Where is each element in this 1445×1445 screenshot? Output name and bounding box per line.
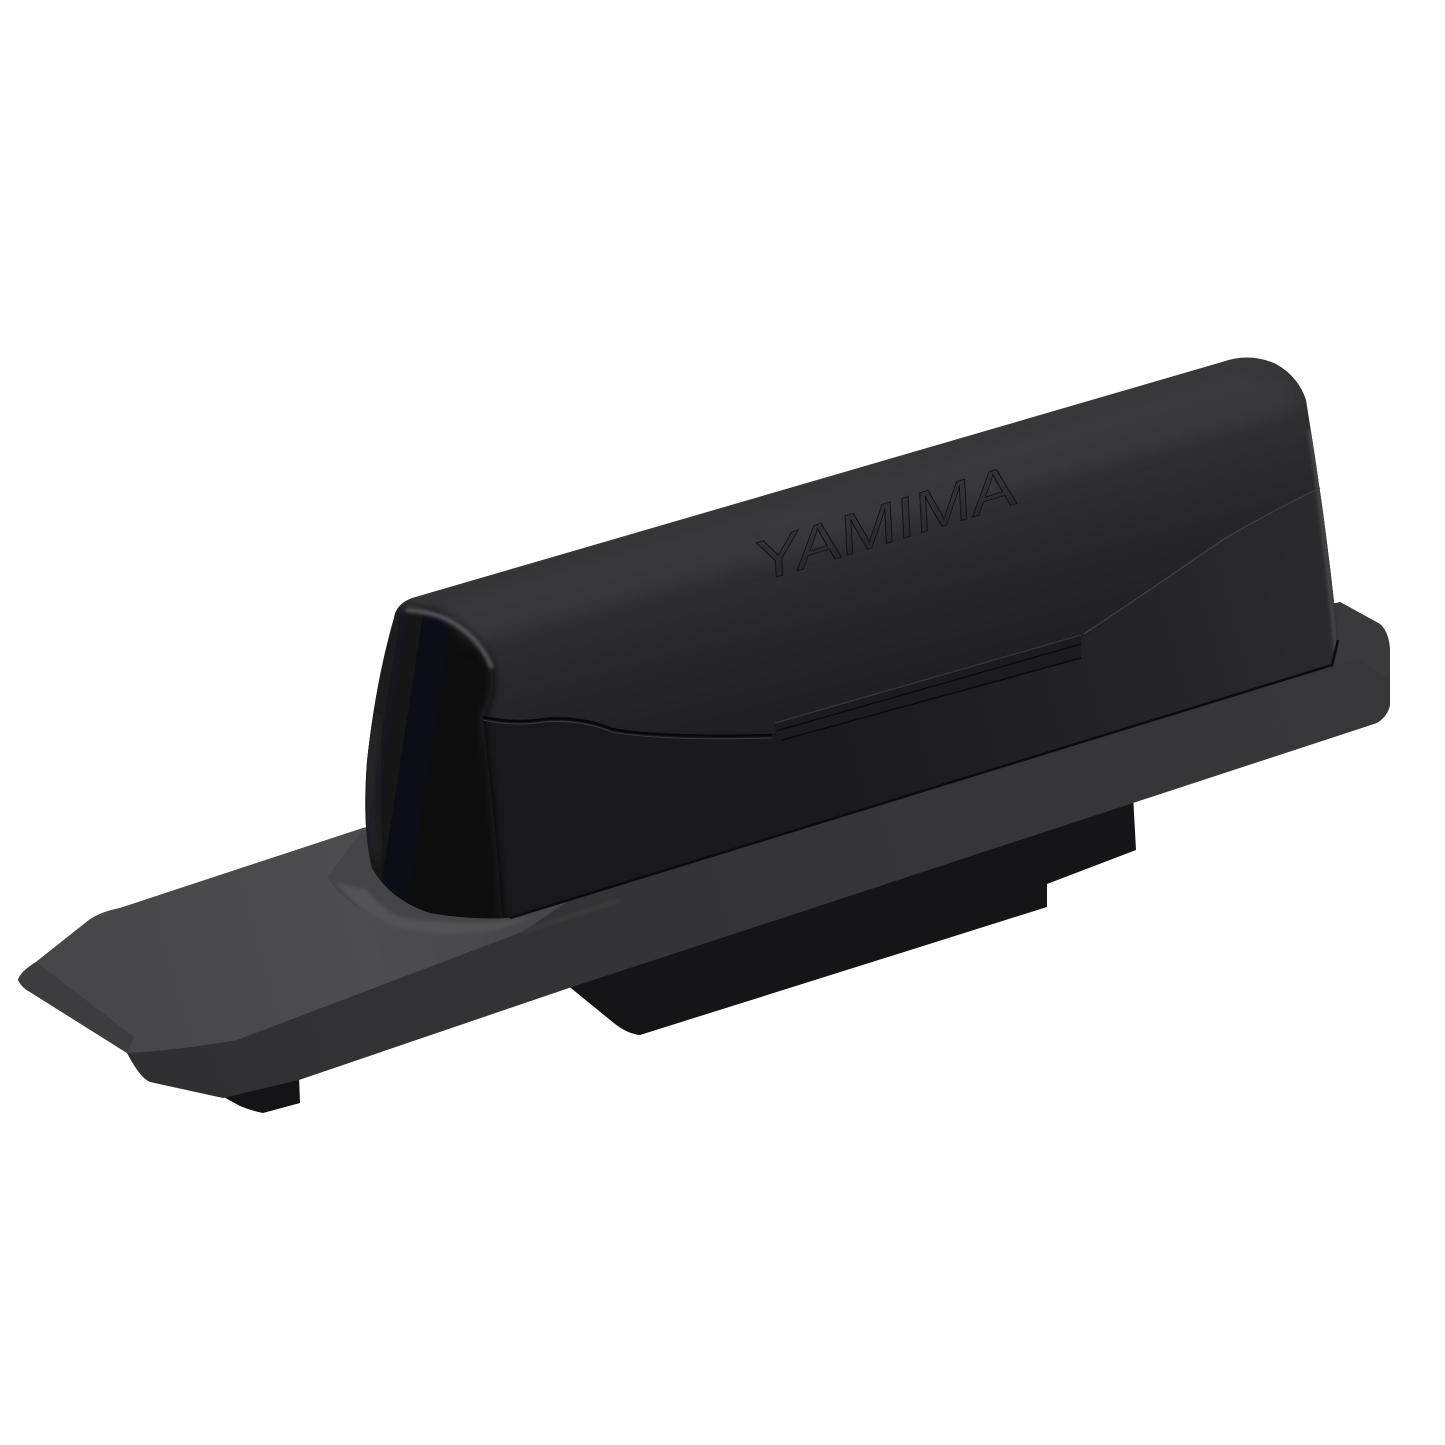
plate outline and front face bbox=[18, 602, 1390, 1098]
front edge of top surface bbox=[522, 900, 620, 932]
base plate bbox=[18, 602, 1390, 1098]
main housing bbox=[350, 357, 1350, 930]
housing silhouette bbox=[365, 357, 1338, 918]
seam crease right bbox=[1084, 488, 1320, 634]
seam crease left bbox=[483, 717, 772, 736]
chamfer facet at tip bbox=[18, 962, 134, 1053]
product photo: black plastic mount bbox=[18, 358, 1390, 1113]
embossed logo: YAMIMA bbox=[754, 453, 1018, 596]
rear foot tab bbox=[220, 1076, 300, 1113]
raised rib bbox=[775, 635, 1081, 740]
right end top ledge bbox=[1335, 602, 1390, 680]
plate top surface, left end bbox=[36, 828, 600, 1053]
moulded ring round the body bbox=[327, 830, 540, 934]
body bottom shadow line bbox=[510, 640, 1338, 918]
top light band bbox=[460, 620, 478, 639]
lower dark panel bbox=[480, 487, 1350, 930]
underside block bbox=[566, 795, 1136, 1035]
left end face bbox=[365, 602, 504, 918]
end-face reflection bbox=[370, 720, 378, 860]
right shoulder highlight bbox=[1310, 430, 1336, 650]
ridge highlight bbox=[406, 610, 492, 668]
